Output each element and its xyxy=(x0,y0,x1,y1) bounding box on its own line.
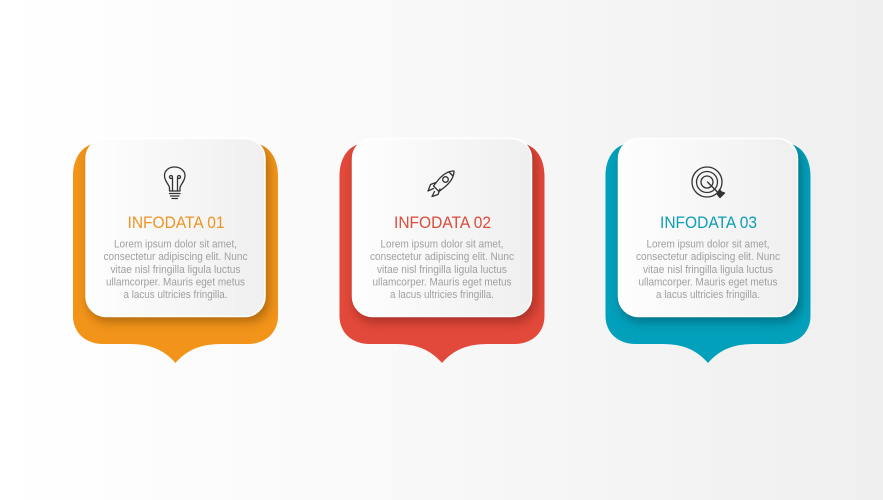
text block xyxy=(370,238,515,301)
text block: vitae nisl fringilla ligula luctus xyxy=(377,264,507,276)
text block: consectetur adipiscing elit. Nunc xyxy=(370,251,515,263)
white card xyxy=(352,138,532,316)
panel: infodata 03 xyxy=(606,138,810,363)
red tag shape xyxy=(340,143,544,363)
heading: INFODATA 03 xyxy=(660,213,757,232)
text block: vitae nisl fringilla ligula luctus xyxy=(643,264,773,276)
text block: Lorem ipsum dolor sit amet, xyxy=(646,238,770,250)
card shadow xyxy=(620,144,802,322)
heading: INFODATA 02 xyxy=(394,213,491,232)
panel: infodata 01 xyxy=(73,138,278,363)
card shadow xyxy=(88,144,269,322)
text block xyxy=(636,238,781,301)
text block: a lacus ultricies fringilla. xyxy=(656,289,760,301)
text block: consectetur adipiscing elit. Nunc xyxy=(104,251,248,263)
card shadow xyxy=(354,144,536,322)
text block: Lorem ipsum dolor sit amet, xyxy=(114,238,237,250)
white card xyxy=(86,138,265,316)
orange tag shape xyxy=(73,143,278,363)
icon: rocket xyxy=(428,171,454,196)
text block: ullamcorper. Mauris eget metus xyxy=(372,276,512,288)
text block: a lacus ultricies fringilla. xyxy=(390,289,494,301)
icon: light bulb xyxy=(164,167,185,198)
text block xyxy=(104,238,248,301)
text block: Lorem ipsum dolor sit amet, xyxy=(380,238,504,250)
panel: infodata 02 xyxy=(340,138,544,363)
text block: a lacus ultricies fringilla. xyxy=(124,289,228,301)
heading: INFODATA 01 xyxy=(128,213,224,232)
icon: target xyxy=(692,167,724,198)
text block: consectetur adipiscing elit. Nunc xyxy=(636,251,781,263)
text block: ullamcorper. Mauris eget metus xyxy=(638,276,778,288)
text block: vitae nisl fringilla ligula luctus xyxy=(110,264,240,276)
teal tag shape xyxy=(606,143,810,363)
white card xyxy=(618,138,798,316)
text block: ullamcorper. Mauris eget metus xyxy=(106,276,245,288)
